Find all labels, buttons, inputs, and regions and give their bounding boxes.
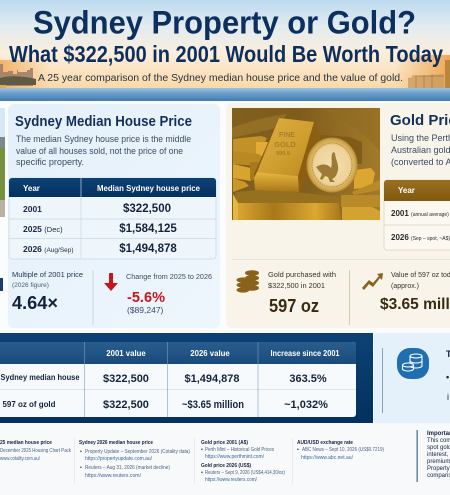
- table: house prices: [9, 178, 216, 259]
- row: 597 oz of gold: 597 oz of gold: [2, 400, 56, 409]
- sources: gold price: Gold price 2001 (A$): [201, 440, 248, 446]
- icon: coin stack: [397, 348, 429, 379]
- left stacked bars: [233, 136, 267, 154]
- row: 597 oz of gold: $322,500: [103, 399, 149, 411]
- table: house prices: Median Sydney house price: [97, 184, 201, 193]
- row: 597 oz of gold: [2, 399, 328, 411]
- sources: gold price: •: [201, 470, 203, 476]
- table: gold prices: Year: [398, 186, 415, 195]
- right stacked bars: [317, 135, 362, 164]
- panel: Sydney median house price: [0, 104, 220, 328]
- column headers: 2026 value: [190, 349, 230, 358]
- gold bar: [254, 118, 320, 192]
- stat: gold purchased: $322,500 in 2001: [268, 283, 325, 290]
- table: gold prices: 2026 (Sep – spot, ~A$): [391, 233, 450, 242]
- sources: Sydney 2026: Reuters – Aug 31, 2026 (market decline): [85, 465, 170, 471]
- panel description: [16, 134, 191, 167]
- sources: gold price: Gold price 2026 (US$): [201, 463, 251, 469]
- stat: change from 2025 to 2026: ($89,247): [127, 305, 164, 315]
- gold coin: [307, 138, 357, 192]
- panel: gold price: [226, 103, 450, 328]
- stat: change from 2025 to 2026: -5.6%: [127, 289, 165, 306]
- takeaway text: i: [447, 392, 449, 402]
- sources: Sydney 2026: https://propertyupdate.com.au/: [85, 456, 152, 462]
- sources: Sydney 2026: Sydney 2026 median house price: [79, 440, 153, 446]
- sources: Sydney 2026: [79, 440, 190, 479]
- sources: exchange rate: https://www.abc.net.au/: [301, 455, 353, 461]
- stat: value of 597 oz: [380, 272, 450, 313]
- table: house prices: $1,584,125: [119, 223, 177, 235]
- house photo strip: [0, 108, 5, 217]
- takeaway text: •: [446, 372, 449, 382]
- gold photo: GOLD: [274, 140, 296, 149]
- panel: comparison table: [0, 333, 373, 423]
- table: house prices: 2001: [23, 204, 42, 214]
- sources: gold price: Reuters – Sept 9, 2026 (US$4,414.30/oz): [205, 470, 285, 476]
- column headers: 2001 value: [106, 349, 146, 358]
- row: Sydney median house: $322,500: [103, 373, 149, 385]
- row: 597 oz of gold: ~1,032%: [284, 399, 328, 411]
- stat: value of 597 oz: (approx.): [391, 283, 419, 290]
- gold photo: [232, 108, 380, 220]
- sources: exchange rate: AUD/USD exchange rate: [297, 440, 353, 446]
- sources: Sydney 2025: 25 median house price: [0, 440, 52, 446]
- gold description: [391, 133, 450, 167]
- panel description: The median Sydney house price is the middle: [16, 134, 191, 144]
- skyline left: [0, 64, 36, 88]
- sources: gold price: https://www.reuters.com/: [205, 477, 257, 483]
- column headers: Increase since 2001: [270, 349, 340, 358]
- row: Sydney median house: [0, 373, 327, 385]
- stat: change from 2025 to 2026: [126, 274, 212, 315]
- icon: trend arrow: [362, 273, 383, 290]
- takeaway text: [446, 349, 450, 402]
- sources: Sydney 2025: [0, 440, 71, 462]
- panel: takeaway callout: [374, 333, 450, 423]
- big bottom bar: [233, 189, 340, 203]
- sources: exchange rate: [297, 440, 384, 461]
- tagline: A 25 year comparison of the Sydney median house price and the value of gold.: [38, 72, 403, 84]
- stat: multiple of 2001 price: [12, 272, 83, 313]
- column headers: [106, 349, 340, 358]
- sources: gold price: Perth Mint – Historical Gold Prices: [205, 447, 274, 453]
- sources: exchange rate: •: [297, 447, 299, 453]
- harbour bridge right: [408, 60, 450, 88]
- title: Sydney Property or Gold?: [33, 4, 416, 40]
- sources: gold price: [201, 440, 285, 483]
- sources: Sydney 2026: •: [80, 465, 82, 471]
- stat: gold purchased: 597 oz: [269, 296, 319, 316]
- icon: growth arrow: [0, 278, 3, 291]
- table: house prices: $1,494,878: [119, 243, 177, 255]
- panel description: specific property.: [16, 157, 84, 167]
- table: house prices: $322,500: [123, 203, 171, 215]
- table: gold prices: 2001 (annual average): [391, 209, 449, 218]
- table: gold prices: [384, 180, 450, 250]
- sources: gold price: https://www.perthmint.com/: [205, 454, 264, 460]
- sources: exchange rate: ABC News – Sept 10, 2026 (US$0.7219): [302, 447, 384, 453]
- sources: Sydney 2025: December 2025 Housing Chart Pack: [0, 448, 71, 454]
- panel heading: Sydney Median House Price: [15, 114, 192, 130]
- table: house prices: 2025 (Dec): [23, 224, 63, 234]
- stat: gold purchased: Gold purchased with: [268, 272, 336, 279]
- gold photo: 999.9: [276, 151, 290, 157]
- table: house prices: 2026 (Aug/Sep): [23, 244, 74, 254]
- stat: gold purchased: [268, 272, 336, 316]
- sources: Sydney 2026: •: [80, 449, 82, 455]
- row: Sydney median house: $1,494,878: [184, 373, 240, 385]
- stat: multiple of 2001 price: Multiple of 2001 price: [12, 272, 83, 279]
- stat: multiple of 2001 price: (2026 figure): [12, 282, 49, 289]
- icon: red down arrow: [104, 273, 118, 291]
- panel description: value of all houses sold, not the price of one: [16, 146, 183, 156]
- row: Sydney median house: 363.5%: [289, 373, 327, 385]
- row: 597 oz of gold: ~$3.65 million: [182, 399, 244, 411]
- row: Sydney median house: Sydney median house: [0, 373, 80, 382]
- sources: gold price: •: [201, 447, 203, 453]
- gold photo: FINE: [279, 132, 295, 139]
- icon: gold coins: [236, 270, 259, 293]
- sources: Sydney 2026: Property Update – September 2026 (Cotality data): [85, 449, 190, 455]
- sources: Sydney 2026: https://www.reuters.com/: [85, 473, 141, 479]
- table: house prices: Year: [23, 184, 40, 193]
- stat: change from 2025 to 2026: Change from 2025 to 2026: [126, 274, 212, 281]
- sources: Sydney 2025: www.cotality.com.au/: [0, 456, 40, 462]
- important note: [416, 430, 450, 482]
- stat: multiple of 2001 price: 4.64×: [12, 293, 58, 313]
